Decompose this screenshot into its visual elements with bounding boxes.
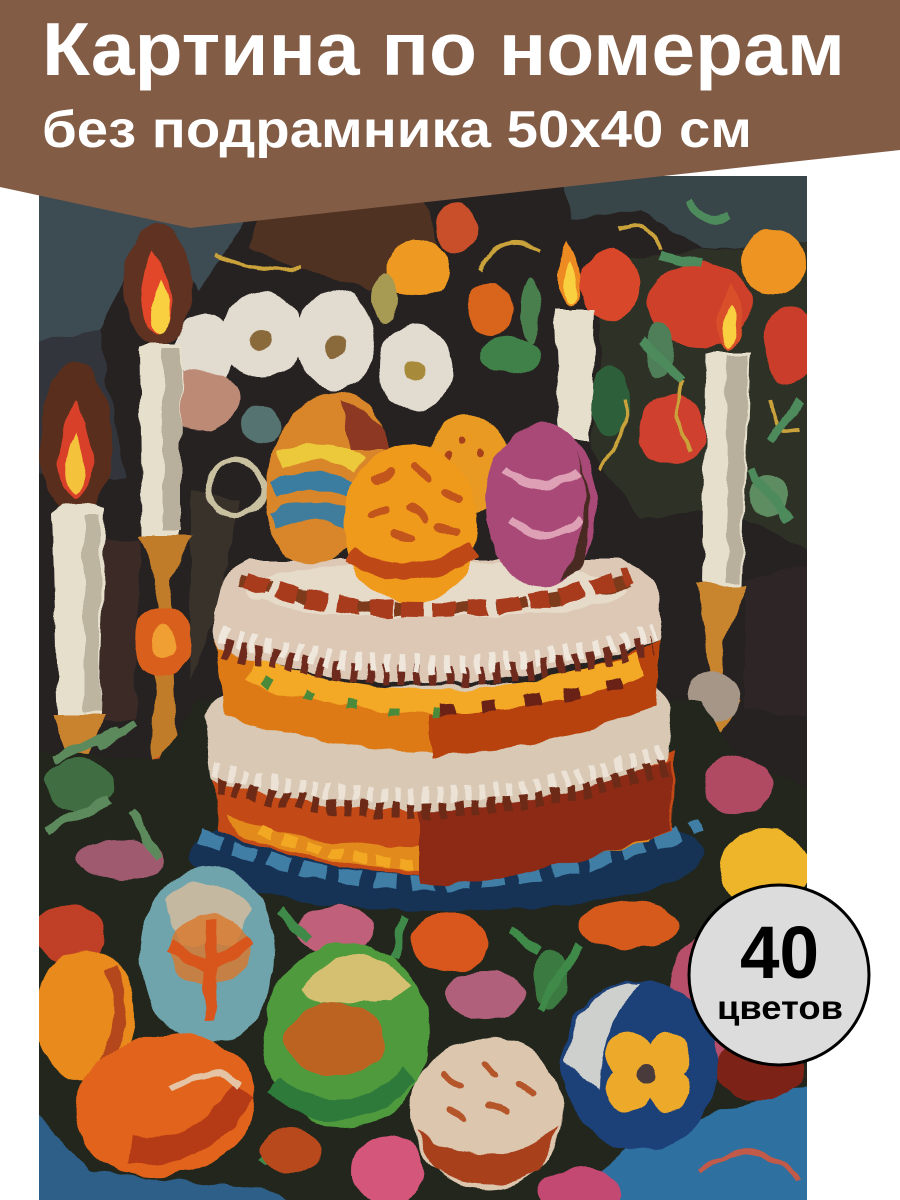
foliage and red flowers top right bbox=[215, 200, 830, 560]
gold ring ornament bbox=[209, 461, 263, 515]
pink egg bbox=[486, 423, 596, 587]
orange egg left bbox=[35, 949, 135, 1081]
cake upper tier bbox=[214, 560, 662, 755]
cake lower tier bbox=[204, 680, 675, 885]
candle 1 with flame and holder bbox=[39, 362, 113, 754]
bottom easter eggs bbox=[35, 828, 809, 1200]
orange egg back bbox=[425, 415, 509, 515]
green tree egg bbox=[264, 943, 430, 1127]
cream egg bbox=[411, 1038, 563, 1190]
lower foliage bbox=[20, 700, 830, 1200]
pink egg behind badge bbox=[670, 939, 725, 1059]
candle 4 with flame and holder bbox=[687, 285, 750, 745]
white blossoms bbox=[160, 290, 452, 445]
dark red egg bbox=[717, 1049, 804, 1101]
subtitle: без подрамника 50х40 см bbox=[42, 101, 752, 159]
badge number: 40 bbox=[740, 911, 819, 994]
yellow egg right bbox=[720, 828, 807, 896]
easter eggs on top of the cake bbox=[245, 378, 630, 610]
candle 2 with flame and holder bbox=[123, 223, 193, 760]
big orange egg bbox=[344, 444, 478, 604]
garland at cake top bbox=[245, 575, 630, 610]
cake plate bbox=[188, 819, 704, 912]
badge: 40 colours bbox=[689, 885, 869, 1065]
painting background blotches bbox=[20, 160, 830, 720]
blue egg with yellow flower bbox=[562, 980, 718, 1150]
painting: Easter cake with eggs and candles bbox=[20, 160, 830, 1200]
blue cloth at bottom bbox=[20, 1080, 830, 1200]
badge label: цветов bbox=[717, 989, 843, 1026]
candle 3 with flame bbox=[554, 240, 595, 440]
pink flowers at bottom bbox=[352, 1136, 424, 1200]
striped egg bbox=[266, 392, 390, 565]
banner: brown title ribbon bbox=[0, 0, 900, 228]
title: Картина по номерам bbox=[42, 7, 845, 91]
blue tree egg bbox=[140, 867, 276, 1043]
orange egg front left bbox=[76, 1033, 254, 1178]
